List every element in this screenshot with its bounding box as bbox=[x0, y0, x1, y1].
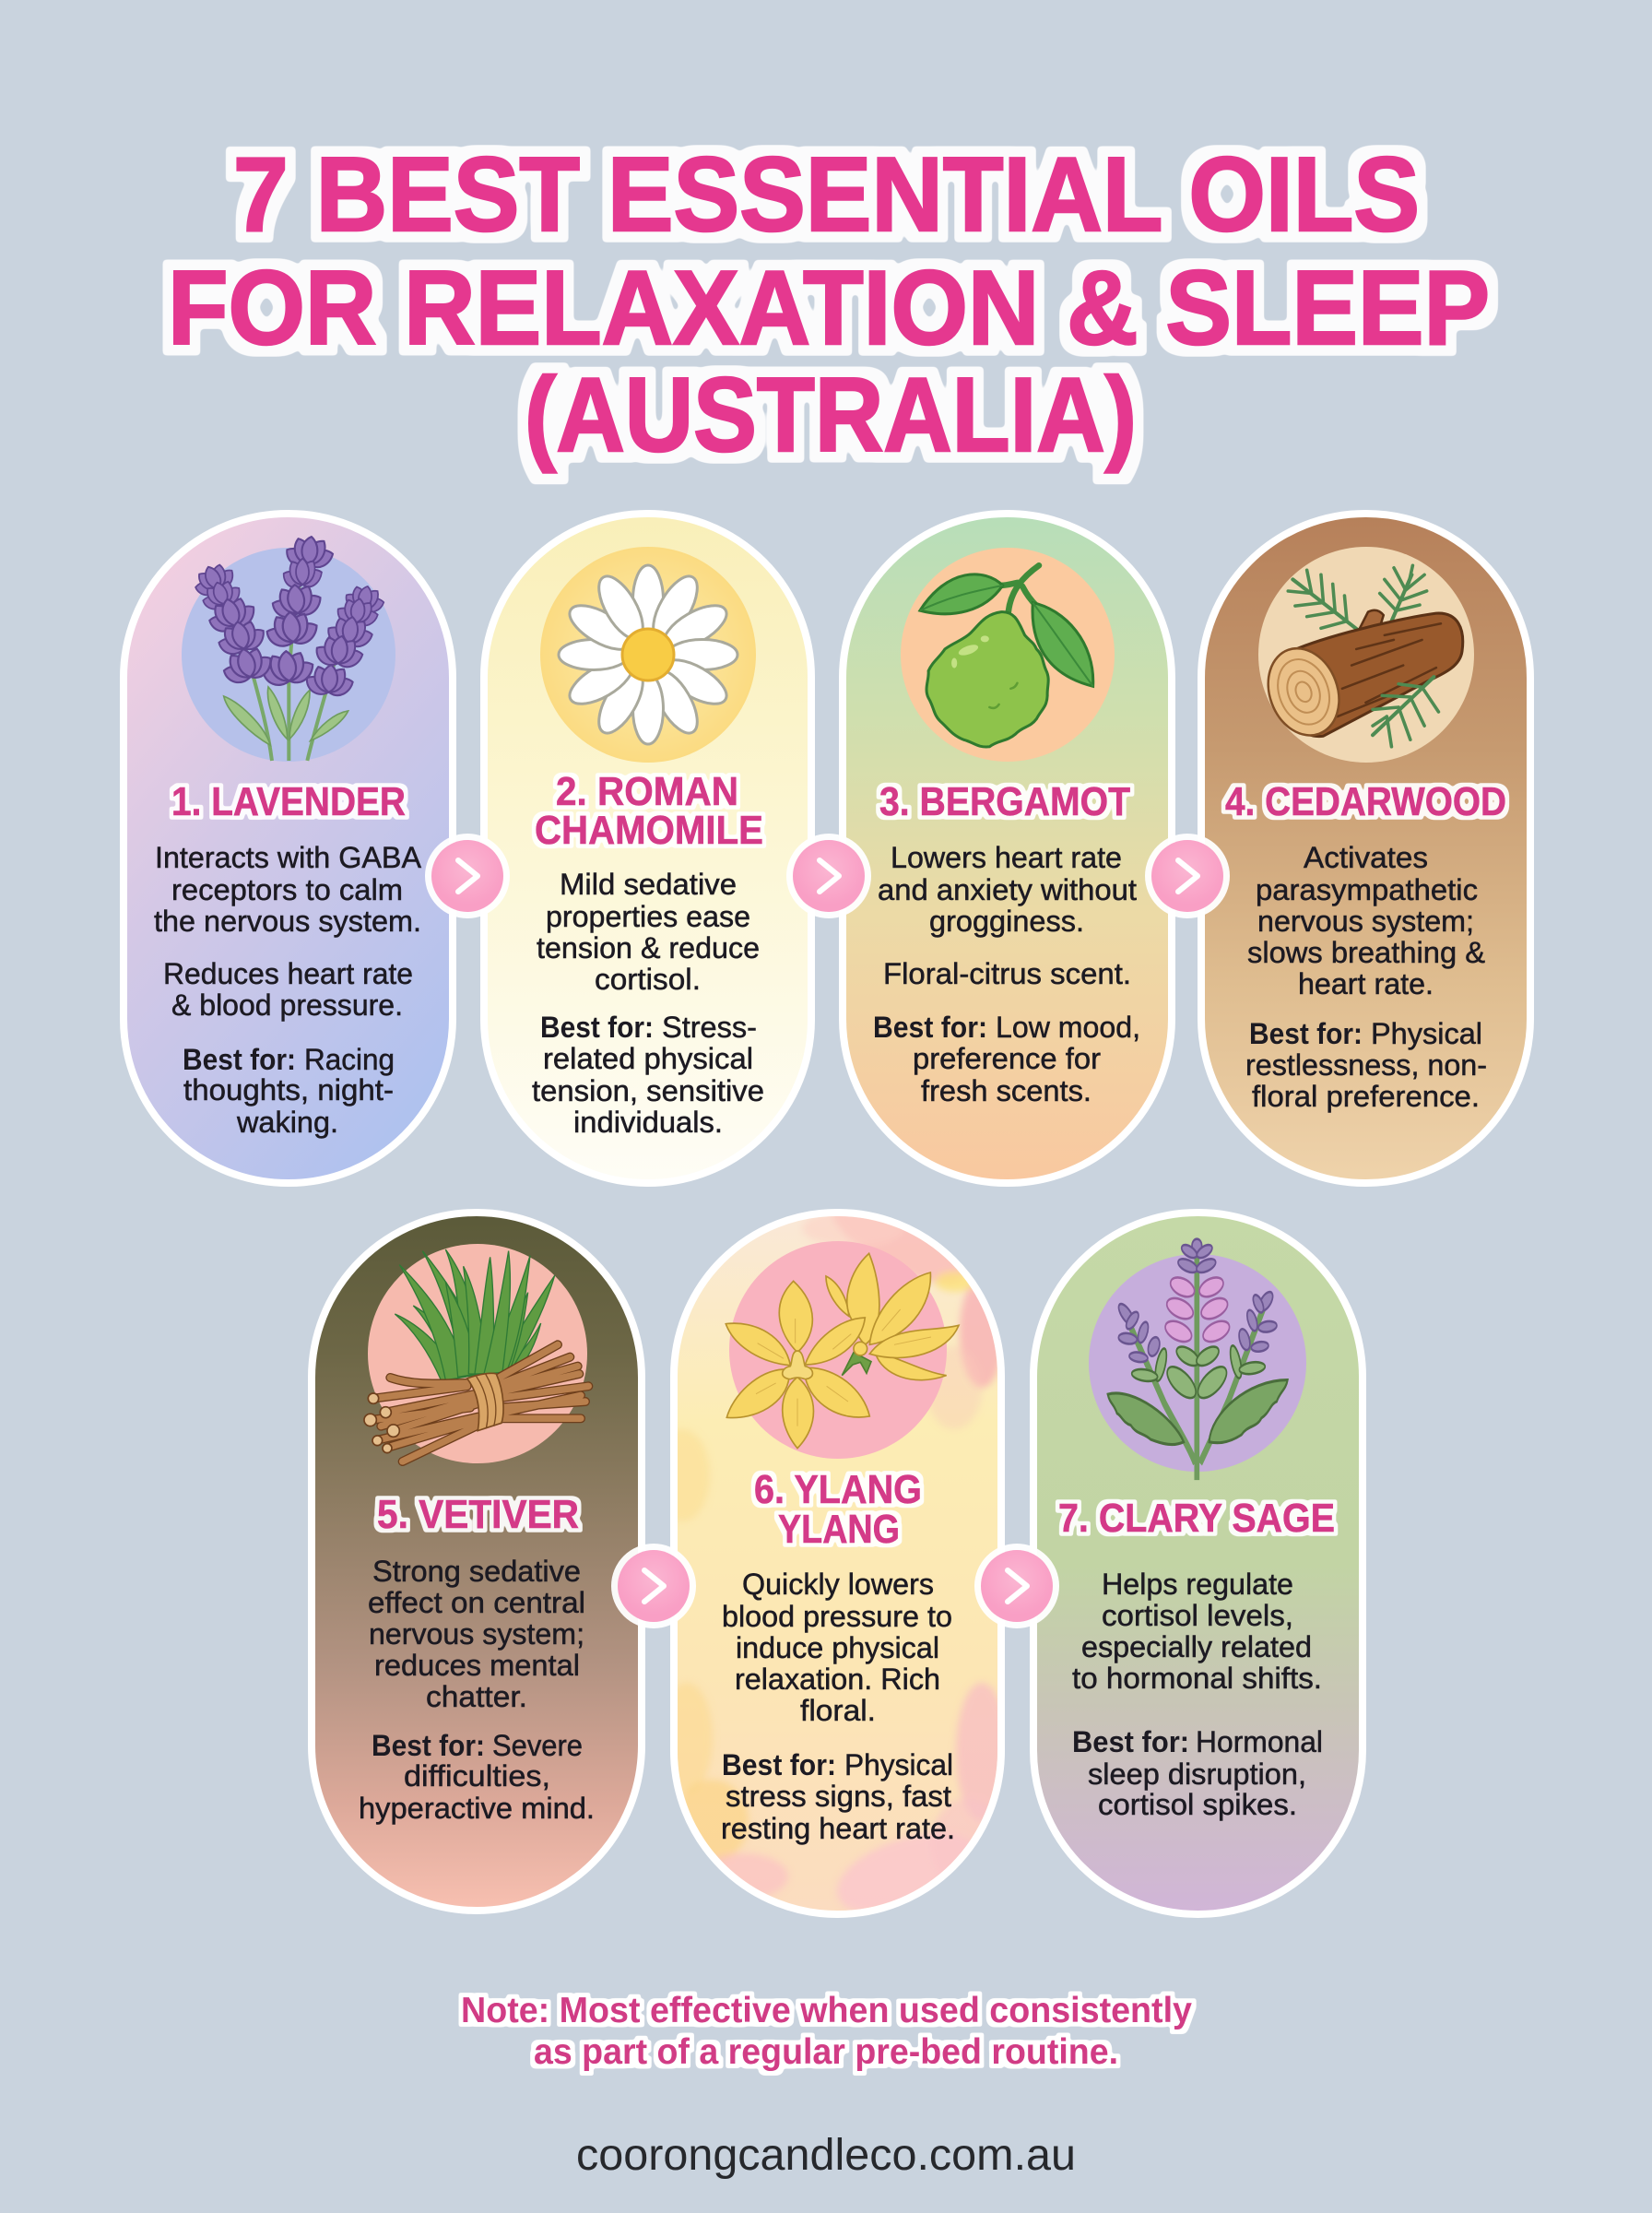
best for: roman chamomile: Stress- bbox=[662, 1011, 757, 1044]
description: cedarwood: nervous system; bbox=[1257, 905, 1474, 938]
best for: ylang ylang: Physical bbox=[844, 1748, 953, 1781]
description: bergamot: grogginess. bbox=[929, 905, 1084, 938]
description: roman chamomile bbox=[537, 868, 760, 996]
arrow 5 to 6 bbox=[611, 1544, 696, 1628]
infographic canvas bbox=[120, 145, 1534, 2179]
arrow 3 to 4 bbox=[1145, 834, 1230, 918]
description: cedarwood bbox=[1247, 841, 1485, 1000]
description: cedarwood: slows breathing & bbox=[1247, 936, 1485, 969]
description: clary sage bbox=[1072, 1568, 1322, 1695]
best for: vetiver: difficulties, bbox=[404, 1759, 550, 1793]
description: ylang ylang: blood pressure to bbox=[722, 1600, 952, 1633]
description: lavender: receptors to calm bbox=[171, 873, 403, 906]
heading: bergamot: 3. BERGAMOT bbox=[879, 779, 1130, 824]
title: 7 BEST ESSENTIAL OILS bbox=[233, 136, 1420, 254]
description: bergamot: and anxiety without bbox=[878, 873, 1137, 906]
icon: lavender bbox=[188, 530, 391, 761]
best for: bergamot: Best for: bbox=[873, 1011, 987, 1044]
panel: lavender bbox=[124, 514, 453, 1183]
panel: vetiver bbox=[312, 1213, 642, 1911]
description: ylang ylang bbox=[722, 1568, 952, 1727]
icon: ylang ylang flowers bbox=[726, 1253, 959, 1449]
best for: vetiver: Severe bbox=[492, 1729, 583, 1762]
description: vetiver: effect on central bbox=[368, 1586, 585, 1619]
description: ylang ylang: floral. bbox=[800, 1694, 876, 1727]
best for: ylang ylang: Best for: bbox=[722, 1748, 836, 1781]
description: lavender bbox=[154, 841, 422, 1022]
website footer: coorongcandleco.com.au bbox=[576, 2131, 1076, 2180]
best for: ylang ylang: resting heart rate. bbox=[721, 1812, 955, 1845]
description: bergamot: Lowers heart rate bbox=[891, 841, 1122, 874]
icon: bergamot fruit bbox=[920, 565, 1093, 747]
best for: roman chamomile: related physical bbox=[543, 1042, 753, 1075]
description: lavender: & blood pressure. bbox=[171, 988, 403, 1022]
panel: bergamot bbox=[843, 514, 1172, 1183]
best for: clary sage: Hormonal bbox=[1196, 1725, 1323, 1758]
heading: ylang ylang: YLANG bbox=[778, 1507, 900, 1552]
best for: bergamot: Low mood, bbox=[996, 1011, 1140, 1044]
heading: cedarwood: 4. CEDARWOOD bbox=[1225, 779, 1506, 824]
best for: lavender: Racing bbox=[304, 1043, 395, 1076]
description: roman chamomile: tension & reduce bbox=[537, 931, 760, 964]
description: cedarwood: parasympathetic bbox=[1256, 873, 1478, 906]
description: bergamot: Floral-citrus scent. bbox=[883, 957, 1131, 990]
best for: lavender: thoughts, night- bbox=[183, 1073, 394, 1106]
best for: clary sage: cortisol spikes. bbox=[1098, 1788, 1297, 1821]
description: clary sage: cortisol levels, bbox=[1102, 1599, 1293, 1632]
best for: clary sage: Best for: bbox=[1072, 1725, 1189, 1758]
best for: roman chamomile: individuals. bbox=[573, 1106, 723, 1139]
best for: cedarwood: Physical bbox=[1371, 1017, 1482, 1050]
icon: vetiver grass and roots bbox=[364, 1249, 588, 1462]
panel: clary sage bbox=[1033, 1213, 1363, 1914]
panel: cedarwood bbox=[1201, 514, 1530, 1183]
description: vetiver bbox=[368, 1555, 585, 1713]
best for: bergamot bbox=[873, 1011, 1140, 1107]
description: lavender: Reduces heart rate bbox=[163, 957, 413, 990]
description: ylang ylang: Quickly lowers bbox=[742, 1568, 934, 1601]
note: Note: Most effective when used consistently bbox=[461, 1991, 1192, 2030]
best for: cedarwood bbox=[1245, 1017, 1487, 1113]
description: vetiver: reduces mental bbox=[374, 1649, 580, 1682]
title bbox=[168, 136, 1490, 474]
heading: ylang ylang bbox=[754, 1467, 922, 1552]
panel: ylang ylang bbox=[655, 1185, 1008, 1930]
description: clary sage: to hormonal shifts. bbox=[1072, 1662, 1322, 1695]
title: FOR RELAXATION & SLEEP bbox=[168, 250, 1490, 367]
description: ylang ylang: relaxation. Rich bbox=[735, 1663, 940, 1696]
description: vetiver: chatter. bbox=[426, 1680, 527, 1713]
icon: cedarwood log bbox=[1257, 565, 1463, 747]
heading: roman chamomile bbox=[535, 769, 763, 853]
best for: bergamot: preference for bbox=[913, 1042, 1101, 1075]
description: bergamot bbox=[878, 841, 1137, 990]
best for: lavender: waking. bbox=[236, 1106, 338, 1139]
best for: roman chamomile: Best for: bbox=[540, 1011, 654, 1044]
best for: clary sage bbox=[1072, 1725, 1323, 1821]
panel: roman chamomile bbox=[484, 514, 811, 1183]
arrow 1 to 2 bbox=[425, 834, 510, 918]
best for: lavender: Best for: bbox=[183, 1043, 296, 1076]
heading: lavender: 1. LAVENDER bbox=[171, 779, 406, 824]
note: as part of a regular pre-bed routine. bbox=[534, 2032, 1118, 2072]
description: cedarwood: Activates bbox=[1304, 841, 1428, 874]
heading: roman chamomile: 2. ROMAN bbox=[556, 769, 738, 814]
note bbox=[461, 1991, 1192, 2072]
heading: clary sage: 7. CLARY SAGE bbox=[1058, 1496, 1335, 1541]
best for: roman chamomile bbox=[532, 1011, 764, 1139]
best for: ylang ylang bbox=[721, 1748, 955, 1845]
description: roman chamomile: properties ease bbox=[546, 900, 750, 933]
description: vetiver: Strong sedative bbox=[372, 1555, 581, 1588]
heading: ylang ylang: 6. YLANG bbox=[754, 1467, 922, 1512]
description: lavender: the nervous system. bbox=[154, 905, 421, 938]
best for: vetiver: Best for: bbox=[372, 1729, 485, 1762]
description: roman chamomile: cortisol. bbox=[595, 963, 701, 996]
best for: lavender bbox=[183, 1043, 395, 1139]
description: cedarwood: heart rate. bbox=[1298, 967, 1434, 1000]
best for: cedarwood: restlessness, non- bbox=[1245, 1048, 1487, 1082]
icon: clary sage plant bbox=[1108, 1239, 1288, 1480]
description: roman chamomile: Mild sedative bbox=[560, 868, 737, 901]
arrow 2 to 3 bbox=[786, 834, 871, 918]
best for: cedarwood: floral preference. bbox=[1252, 1080, 1480, 1113]
best for: bergamot: fresh scents. bbox=[921, 1074, 1092, 1107]
floral background blobs bbox=[678, 1216, 997, 1910]
icon: chamomile flower bbox=[559, 565, 738, 744]
description: clary sage: especially related bbox=[1081, 1630, 1312, 1663]
description: clary sage: Helps regulate bbox=[1102, 1568, 1293, 1601]
description: vetiver: nervous system; bbox=[369, 1617, 584, 1651]
description: ylang ylang: induce physical bbox=[736, 1631, 939, 1664]
heading: vetiver: 5. VETIVER bbox=[377, 1492, 579, 1537]
best for: vetiver: hyperactive mind. bbox=[359, 1792, 595, 1825]
heading: roman chamomile: CHAMOMILE bbox=[535, 808, 763, 853]
best for: clary sage: sleep disruption, bbox=[1088, 1757, 1306, 1791]
best for: vetiver bbox=[359, 1729, 595, 1825]
title: (AUSTRALIA) bbox=[525, 357, 1137, 474]
best for: ylang ylang: stress signs, fast bbox=[726, 1780, 951, 1813]
arrow 6 to 7 bbox=[974, 1544, 1059, 1628]
best for: roman chamomile: tension, sensitive bbox=[532, 1074, 764, 1107]
description: lavender: Interacts with GABA bbox=[155, 841, 422, 874]
best for: cedarwood: Best for: bbox=[1249, 1017, 1363, 1050]
